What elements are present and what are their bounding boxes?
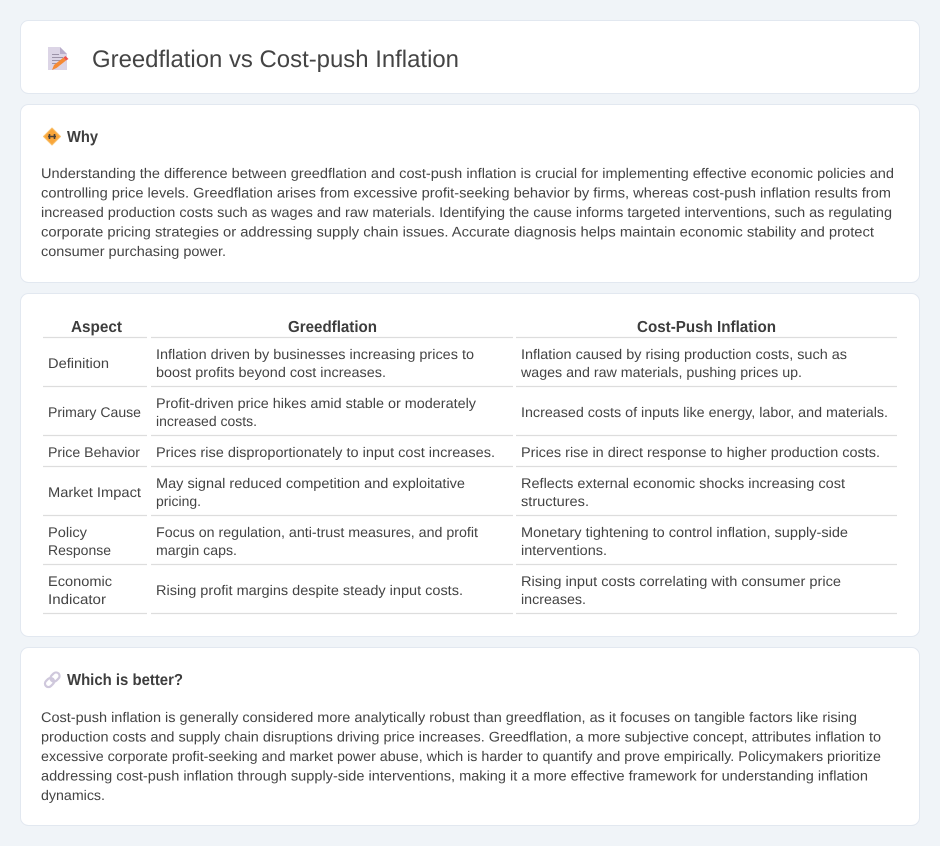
row: economic indicator: Rising profit margins despite steady input costs. — [156, 582, 463, 598]
row: economic indicator: increases. — [521, 591, 586, 607]
row: price behavior: Prices rise disproportionately to input cost increases. — [156, 444, 495, 460]
row: price behavior — [48, 444, 880, 460]
row: market impact: May signal reduced competition and exploitative — [156, 475, 465, 491]
table header row: Aspect — [71, 319, 123, 336]
row: definition: wages and raw materials, pushing prices up. — [520, 364, 802, 380]
title: Greedflation vs Cost-push Inflation — [92, 46, 459, 73]
text block: why paragraph: controlling price levels. Greedflation arises from excessive profit-seeking behavior by firms, whereas cost-push inflation results from — [41, 184, 891, 200]
text block: which is better paragraph: production costs and supply chain disruptions driving price increases. Greedflation, a more subjective concept, attributes inflation to — [41, 728, 881, 744]
row: market impact — [48, 475, 845, 509]
text block: which is better paragraph: addressing cost-push inflation through supply-side interventions, making it a more effective framework for understanding inflation — [41, 768, 868, 784]
row: definition — [48, 346, 847, 380]
icon: chain link — [43, 671, 61, 689]
row: primary cause — [48, 395, 888, 429]
text block: which is better paragraph — [41, 709, 881, 803]
row: policy response: interventions. — [521, 542, 607, 558]
table header row — [71, 319, 776, 336]
text block: which is better paragraph: excessive corporate profit-seeking and market power abuse, which is harder to quantify and prove empirically. Policymakers prioritize — [41, 748, 881, 764]
row: definition: Inflation caused by rising production costs, such as — [521, 346, 847, 362]
panel: comparison table — [20, 294, 920, 636]
row: market impact: Reflects external economic shocks increasing cost — [521, 475, 845, 491]
row: price behavior: Price Behavior — [48, 444, 140, 460]
row: price behavior: Prices rise in direct response to higher production costs. — [521, 444, 880, 460]
icon: memo with pencil — [48, 47, 68, 70]
row: policy response: margin caps. — [156, 542, 237, 558]
row: policy response: Focus on regulation, anti-trust measures, and profit — [156, 524, 478, 540]
text block: why paragraph: corporate pricing strategies or addressing supply chain issues. Accurate diagnosis helps maintain economic stability and protect — [41, 224, 874, 240]
icon: orange diamond sign — [44, 128, 60, 145]
row: definition: boost profits beyond cost increases. — [156, 364, 386, 380]
text block: why paragraph — [41, 165, 894, 259]
row: economic indicator: Indicator — [48, 591, 106, 607]
text block: which is better paragraph: dynamics. — [41, 787, 105, 803]
row: primary cause: Profit-driven price hikes amid stable or moderately — [156, 395, 476, 411]
row: primary cause: Increased costs of inputs like energy, labor, and materials. — [521, 404, 888, 420]
heading: why: Why — [67, 129, 98, 146]
heading: which is better: Which is better? — [67, 672, 183, 689]
text block: why paragraph: consumer purchasing power. — [41, 243, 226, 259]
row: market impact: Market Impact — [48, 484, 141, 500]
row: definition: Inflation driven by businesses increasing prices to — [156, 346, 474, 362]
text block: which is better paragraph: Cost-push inflation is generally considered more analytically robust than greedflation, as it focuses on tangible factors like rising — [41, 709, 857, 725]
table header row: Greedflation — [288, 319, 377, 336]
row: policy response: Policy — [48, 524, 87, 540]
row: definition: Definition — [48, 355, 109, 371]
row: policy response: Monetary tightening to control inflation, supply-side — [521, 524, 848, 540]
row: market impact: pricing. — [156, 493, 201, 509]
row: economic indicator — [48, 573, 841, 607]
panel: why — [20, 104, 920, 282]
text block: why paragraph: Understanding the difference between greedflation and cost-push inflation is crucial for implementing effective economic policies and — [41, 165, 894, 181]
panel: title header — [20, 20, 920, 94]
row: economic indicator: Economic — [48, 573, 112, 589]
text block: why paragraph: increased production costs such as wages and raw materials. Identifying the cause informs targeted interventions, such as regulating — [41, 204, 892, 220]
row: economic indicator: Rising input costs correlating with consumer price — [521, 573, 841, 589]
row: primary cause: increased costs. — [156, 413, 257, 429]
row: market impact: structures. — [521, 493, 589, 509]
row: primary cause: Primary Cause — [48, 404, 141, 420]
table header row: Cost-Push Inflation — [637, 319, 776, 336]
panel: which is better — [20, 648, 920, 826]
row: policy response: Response — [48, 542, 111, 558]
row: policy response — [48, 524, 848, 558]
